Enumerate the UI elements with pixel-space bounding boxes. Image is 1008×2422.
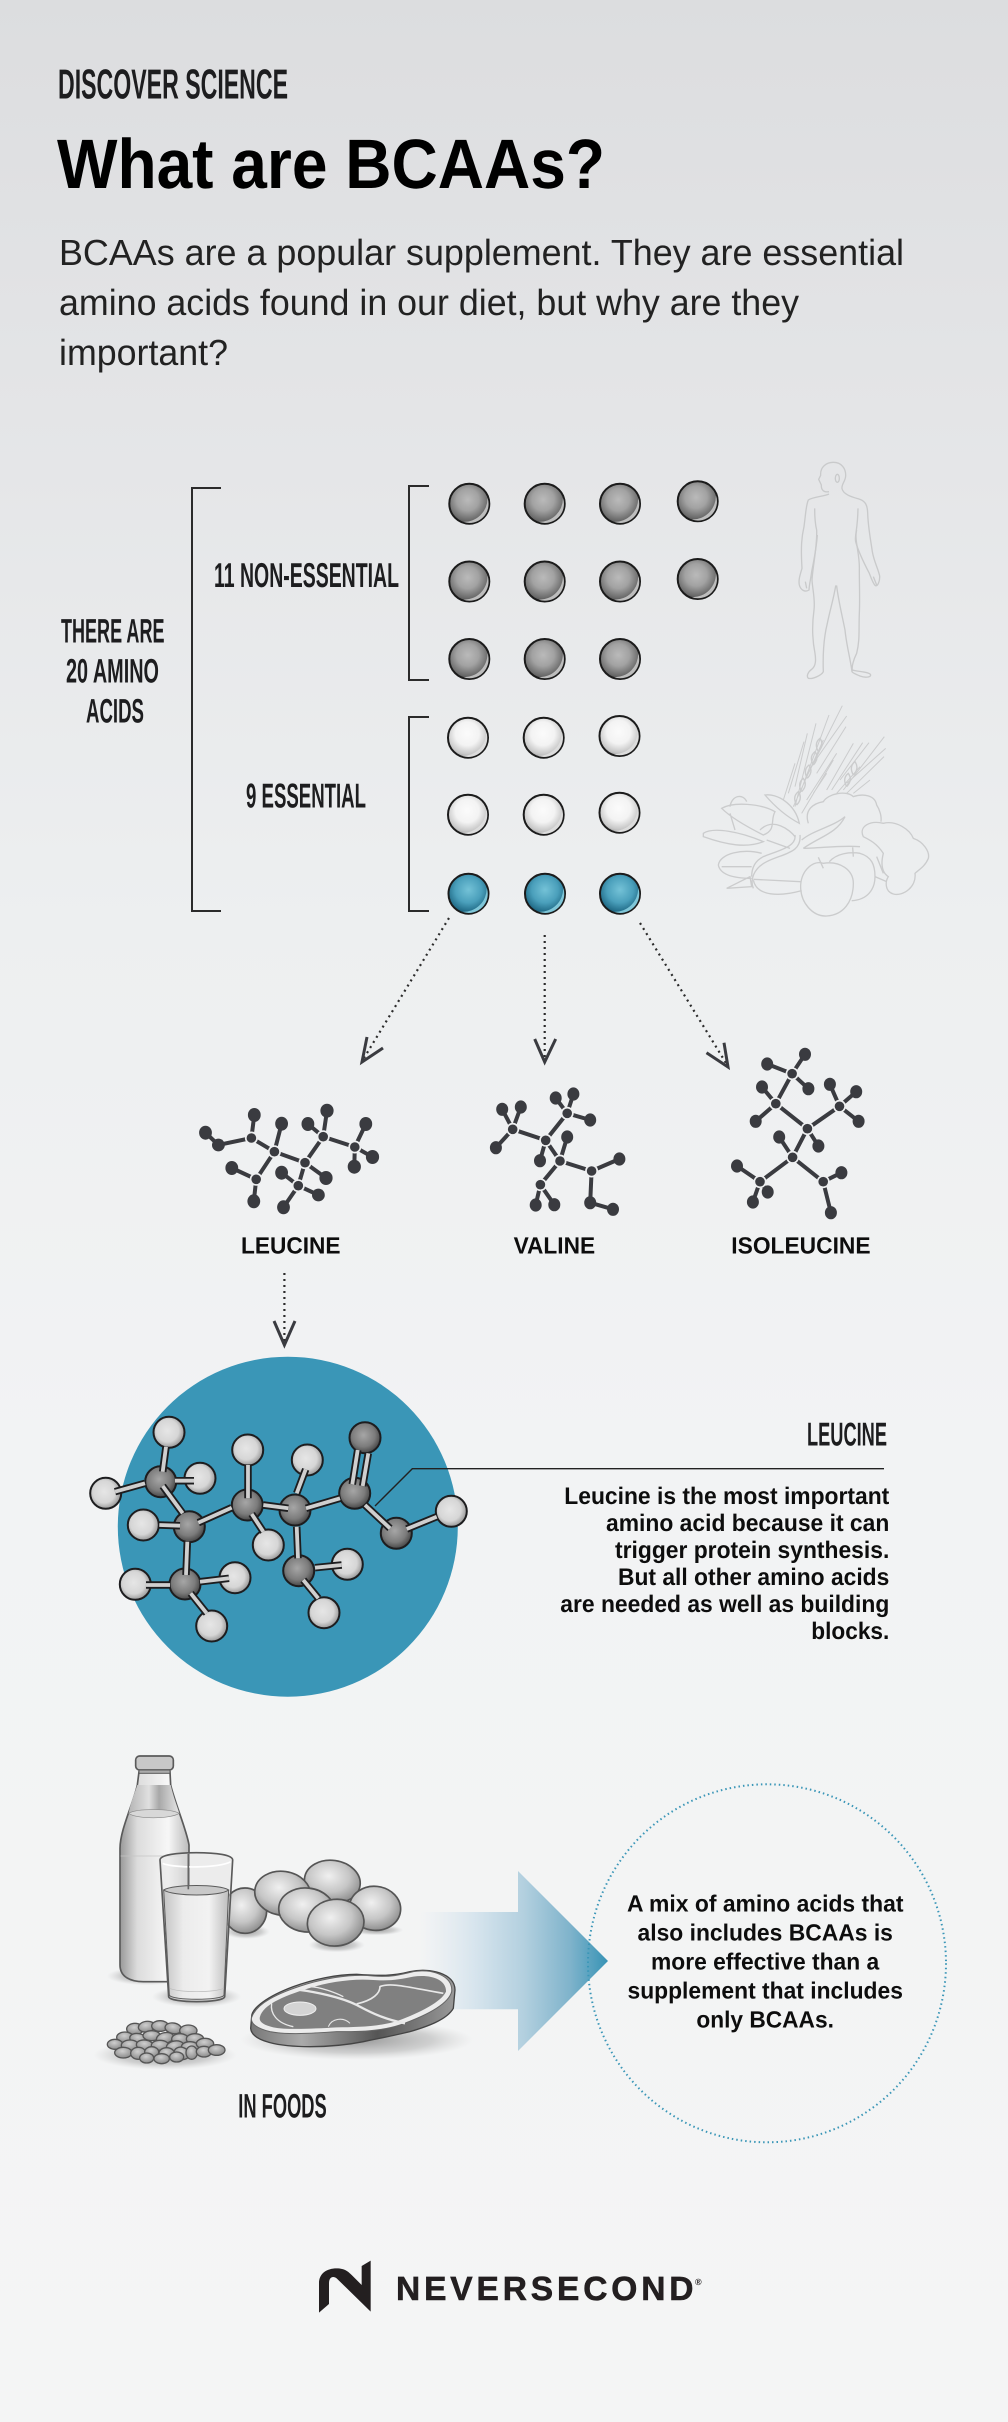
title: What are BCAAs? <box>57 125 605 203</box>
logo wordmark: NEVERSECOND <box>396 2271 694 2308</box>
teal circle <box>118 1357 458 1697</box>
outer bracket <box>192 488 221 911</box>
leucine description: Leucine is the most important <box>564 1483 889 1510</box>
registered mark: ® <box>695 2277 702 2287</box>
icon: milk bottle <box>120 1756 189 1982</box>
foods illustration <box>93 1756 473 2070</box>
callout text: also includes BCAAs is <box>638 1920 893 1946</box>
leucine description: But all other amino acids <box>618 1564 889 1591</box>
essential amino acid balls <box>448 716 640 835</box>
callout text: more effective than a <box>651 1949 880 1975</box>
non-essential amino acid balls <box>449 481 718 679</box>
BCAA balls in blue <box>448 874 640 914</box>
label: valine: VALINE <box>514 1232 595 1258</box>
callout text: A mix of amino acids that <box>627 1891 904 1917</box>
heading: leucine: LEUCINE <box>807 1415 887 1452</box>
molecule: isoleucine small <box>731 1048 865 1219</box>
leucine description: trigger protein synthesis. <box>615 1537 889 1564</box>
leucine ball and stick model <box>90 1417 467 1642</box>
label: leucine: LEUCINE <box>241 1232 340 1258</box>
bracket: essential <box>409 717 429 911</box>
logo mark <box>319 2261 371 2313</box>
label: 11 non-essential: 11 NON-ESSENTIAL <box>214 557 399 595</box>
callout text: only BCAAs. <box>696 2007 834 2033</box>
dotted circle <box>588 1784 946 2142</box>
intro text: BCAAs are a popular supplement. They are essential <box>59 232 904 273</box>
intro text: amino acids found in our diet, but why are they <box>59 282 800 323</box>
food shadows <box>93 1924 473 2070</box>
icon: human body outline <box>799 462 880 678</box>
dotted arrow to leucine <box>362 918 449 1062</box>
dotted arrow to leucine detail <box>274 1273 295 1345</box>
molecule: valine small <box>490 1087 625 1216</box>
bracket: non-essential <box>409 486 429 680</box>
leucine description: are needed as well as building <box>560 1591 889 1618</box>
icon: steak <box>251 1970 455 2047</box>
logo: neversecond <box>319 2261 702 2313</box>
icon: glass of milk <box>160 1853 233 2002</box>
callout text <box>627 1891 904 2033</box>
icon: eggs <box>223 1857 403 1949</box>
icon: seed pile <box>107 2020 225 2064</box>
label: 9 essential: 9 ESSENTIAL <box>246 778 366 816</box>
label: there are 20 amino acids: ACIDS <box>86 692 144 730</box>
molecule: leucine small <box>199 1104 379 1214</box>
leucine description: amino acid because it can <box>606 1510 889 1537</box>
callout text: supplement that includes <box>628 1978 903 2004</box>
label: there are 20 amino acids: 20 AMINO <box>66 652 159 690</box>
leucine description: blocks. <box>811 1618 889 1645</box>
label: isoleucine: ISOLEUCINE <box>731 1232 871 1258</box>
label: there are 20 amino acids <box>61 612 164 730</box>
intro text: important? <box>59 332 228 373</box>
intro text <box>59 232 904 373</box>
leucine description <box>560 1483 889 1645</box>
label: there are 20 amino acids: THERE ARE <box>61 612 164 650</box>
eyebrow: discover science: DISCOVER SCIENCE <box>58 60 288 108</box>
label: in foods: IN FOODS <box>238 2087 327 2125</box>
dotted arrow to valine <box>535 935 556 1062</box>
dotted arrow to isoleucine <box>640 923 728 1067</box>
leader line <box>375 1469 884 1506</box>
icon: plant foods outline <box>703 706 929 916</box>
gradient arrow <box>420 1871 608 2051</box>
